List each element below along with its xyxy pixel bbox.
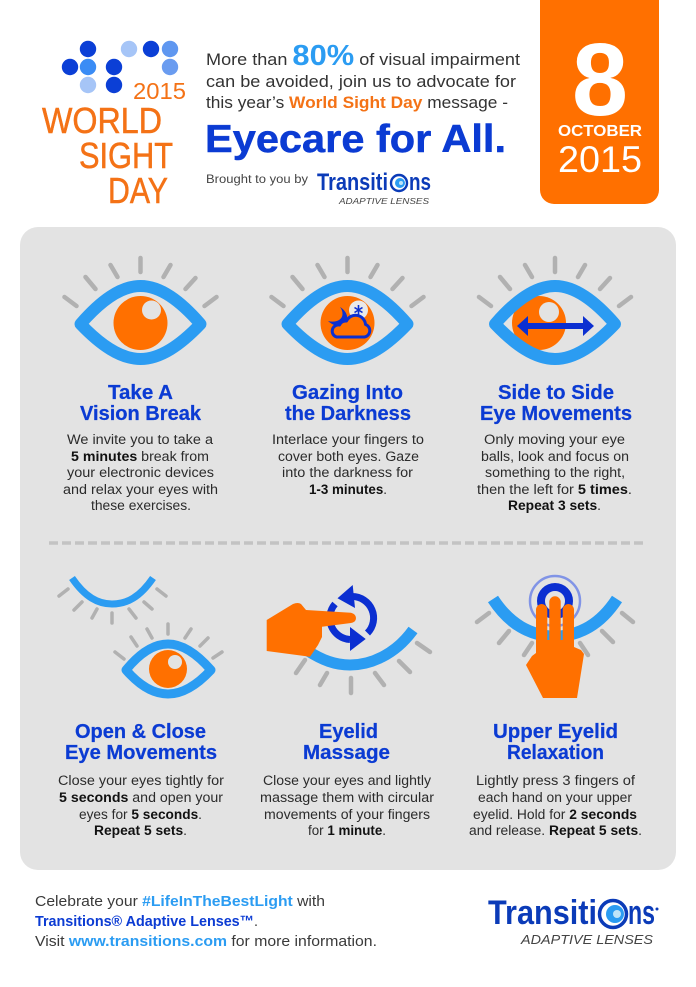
text: gazing xyxy=(272,432,424,497)
hand xyxy=(267,603,356,657)
title: Gazing Into the Darkness xyxy=(285,381,411,425)
text: eyelid massage: for 1 minute. xyxy=(308,823,386,838)
header message: More than 80% of visual impairment xyxy=(206,40,520,72)
text: gazing: into the darkness for xyxy=(282,465,414,480)
date badge: 8 xyxy=(572,22,628,137)
text: upper eyelid: Lightly press 3 fingers of xyxy=(476,773,635,788)
text: side to side xyxy=(477,432,632,513)
footer message: Visit www.transitions.com for more information. xyxy=(35,933,377,950)
title: Side to Side Eye Movements: Eye Movements xyxy=(480,402,632,425)
title: Side to Side Eye Movements xyxy=(480,381,632,425)
text: gazing: 1-3 minutes. xyxy=(309,482,387,497)
icon: eye with orange iris xyxy=(64,258,216,359)
title: Side to Side Eye Movements: Side to Side xyxy=(498,381,614,404)
panel: exercises xyxy=(20,227,676,870)
title: Upper Eyelid Relaxation: Upper Eyelid xyxy=(493,720,618,743)
text: gazing: cover both eyes. Gaze xyxy=(278,449,419,464)
small Transitions logo: Transiti xyxy=(317,169,388,196)
title: Gazing Into the Darkness: Gazing Into xyxy=(292,381,403,404)
rotation arrows xyxy=(330,585,374,651)
title: Open and Close Eye Movements: Open & Close xyxy=(75,720,206,743)
sponsor line: Brought to you by xyxy=(206,174,308,186)
title: Upper Eyelid Relaxation: Relaxation xyxy=(507,741,604,764)
header message xyxy=(206,40,520,112)
text: open and close: eyes for 5 seconds. xyxy=(79,807,202,822)
title: Eyelid Massage: Eyelid xyxy=(319,720,378,743)
logo year: 2015 xyxy=(133,78,186,104)
large Transitions logo: ADAPTIVE LENSES xyxy=(520,933,654,947)
text: side to side: something to the right, xyxy=(485,465,625,480)
title: Eyelid Massage: Massage xyxy=(303,741,390,764)
title: Upper Eyelid Relaxation xyxy=(493,720,618,764)
footer message xyxy=(35,893,377,950)
hand xyxy=(526,596,584,698)
date badge xyxy=(540,0,659,204)
text: vision break: We invite you to take a xyxy=(67,432,214,447)
large Transitions logo: Transiti xyxy=(488,894,597,932)
text: gazing: Interlace your fingers to xyxy=(272,432,424,447)
text: vision break: and relax your eyes with xyxy=(63,482,218,497)
logo wordmark: WORLD xyxy=(42,100,162,141)
text: eyelid massage: movements of your fingers xyxy=(264,807,430,822)
icon: closed and open eye xyxy=(59,578,222,694)
icon: eye with side to side arrow xyxy=(479,258,631,359)
header message: can be avoided, join us to advocate for xyxy=(206,72,516,91)
icon: three fingers on upper eyelid xyxy=(477,576,633,698)
text: side to side: Repeat 3 sets. xyxy=(508,498,601,513)
text: open and close: Repeat 5 sets. xyxy=(94,823,187,838)
large Transitions logo: ns xyxy=(628,894,655,932)
text: vision break: your electronic devices xyxy=(67,465,214,480)
title: Take A Vision Break: Take A xyxy=(108,381,173,404)
headline: Eyecare for All: Eyecare for All. xyxy=(205,118,506,161)
text: vision break: these exercises. xyxy=(91,498,191,513)
text: upper eyelid: and release. Repeat 5 sets. xyxy=(469,823,642,838)
text: eyelid massage: massage them with circular xyxy=(260,790,435,805)
text: upper eyelid: each hand on your upper xyxy=(478,790,633,805)
small Transitions logo: ns xyxy=(409,169,431,196)
title: Open and Close Eye Movements xyxy=(65,720,217,764)
text: upper eyelid: eyelid. Hold for 2 seconds xyxy=(473,807,637,822)
text: vision break xyxy=(63,432,218,513)
text: side to side: Only moving your eye xyxy=(484,432,625,447)
logo wordmark xyxy=(42,100,173,211)
footer message: Transitions® Adaptive Lenses™. xyxy=(35,913,258,930)
small Transitions logo: ADAPTIVE LENSES xyxy=(338,196,429,206)
text: side to side: balls, look and focus on xyxy=(481,449,629,464)
footer message: Celebrate your #LifeInTheBestLight with xyxy=(35,893,325,910)
text: side to side: then the left for 5 times . xyxy=(477,482,632,497)
text: vision break: 5 minutes break from xyxy=(71,449,209,464)
title: Take A Vision Break xyxy=(80,381,202,425)
small Transitions logo xyxy=(317,169,431,206)
text: upper eyelid xyxy=(469,773,642,838)
date badge: OCTOBER xyxy=(558,123,642,140)
date badge: 2015 xyxy=(558,139,642,180)
logo wordmark: SIGHT xyxy=(79,135,173,176)
large Transitions logo xyxy=(488,894,658,947)
header message: this year’s World Sight Day message - xyxy=(206,93,508,112)
icon: eye with moon and cloud xyxy=(272,258,424,359)
logo dots xyxy=(62,41,178,93)
logo: World Sight Day 2015 xyxy=(42,41,186,211)
icon: finger massaging eyelid xyxy=(267,585,430,693)
text: open and close xyxy=(58,773,225,838)
text: open and close: 5 seconds and open your xyxy=(59,790,224,805)
text: open and close: Close your eyes tightly for xyxy=(58,773,225,788)
logo wordmark: DAY xyxy=(108,170,168,211)
text: eyelid massage xyxy=(260,773,435,838)
title: Gazing Into the Darkness: the Darkness xyxy=(285,402,411,425)
title: Take A Vision Break: Vision Break xyxy=(80,402,202,425)
title: Eyelid Massage xyxy=(303,720,390,764)
title: Open and Close Eye Movements: Eye Movements xyxy=(65,741,217,764)
text: eyelid massage: Close your eyes and lightly xyxy=(263,773,431,788)
